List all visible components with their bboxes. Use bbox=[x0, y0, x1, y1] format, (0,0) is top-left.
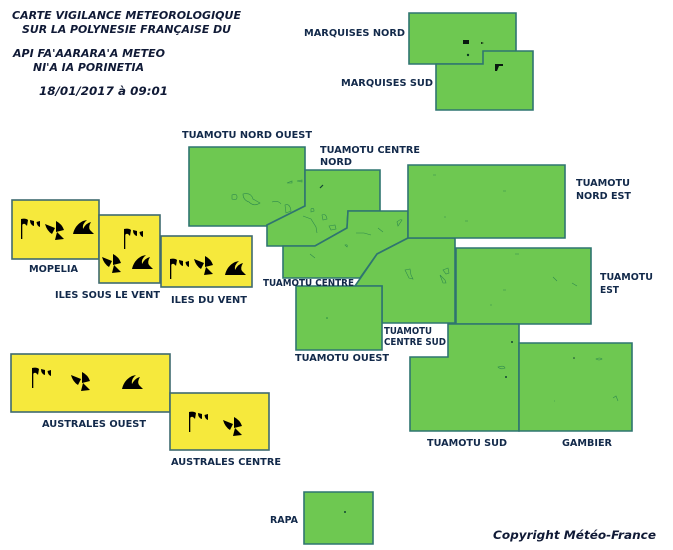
panel: Iles du Vent bbox=[161, 236, 252, 287]
label: Tuamotu Nord Ouest: TUAMOTU NORD OUEST bbox=[182, 130, 312, 141]
panel: Tuamotu Nord Est bbox=[408, 165, 565, 238]
panel: Marquises Nord bbox=[409, 13, 516, 64]
icon: wave bbox=[132, 255, 153, 269]
icon: wind bbox=[170, 259, 189, 279]
label: Tuamotu Est: TUAMOTU bbox=[600, 272, 653, 283]
icon: rain bbox=[194, 256, 213, 275]
label: Tuamotu Nord Est bbox=[576, 178, 631, 202]
icon: rain bbox=[223, 417, 242, 436]
panel: Tuamotu Centre bbox=[283, 211, 408, 278]
label: Tuamotu Centre Nord bbox=[320, 145, 420, 168]
panel: Marquises Sud bbox=[436, 51, 533, 110]
icon: rain bbox=[71, 372, 90, 391]
label: Tuamotu Centre Nord: TUAMOTU CENTRE bbox=[320, 145, 420, 156]
icon: wave bbox=[122, 375, 143, 389]
label: Tuamotu Est bbox=[600, 272, 653, 296]
label: Tuamotu Centre Sud: TUAMOTU bbox=[384, 326, 432, 337]
icon: wind bbox=[189, 412, 208, 432]
icon: wave bbox=[73, 220, 94, 234]
panel: Iles Sous le Vent bbox=[99, 215, 160, 283]
label: Tuamotu Nord Est: NORD EST bbox=[576, 191, 631, 202]
icon: wave bbox=[225, 261, 246, 275]
panel: Australes Ouest bbox=[11, 354, 170, 412]
icon: wind bbox=[21, 219, 40, 239]
label: Tuamotu Centre Sud bbox=[384, 326, 446, 348]
label: Marquises Sud: MARQUISES SUD bbox=[341, 78, 433, 89]
panel: Gambier bbox=[519, 343, 632, 431]
copyright: Copyright Météo-France bbox=[493, 528, 656, 542]
label: Tuamotu Nord Est: TUAMOTU bbox=[576, 178, 630, 189]
label: Tuamotu Centre Nord: NORD bbox=[320, 157, 352, 168]
label: Iles du Vent: ILES DU VENT bbox=[171, 295, 247, 306]
title block: SUR LA POLYNESIE FRANÇAISE DU bbox=[22, 24, 231, 36]
label: Gambier: GAMBIER bbox=[562, 438, 613, 449]
title block: CARTE VIGILANCE METEOROLOGIQUE bbox=[12, 10, 242, 22]
label: Iles Sous le Vent: ILES SOUS LE VENT bbox=[55, 290, 160, 301]
icon: rain bbox=[102, 254, 121, 273]
panel: Tuamotu Nord Ouest bbox=[189, 147, 305, 226]
panel: Tuamotu Ouest bbox=[296, 286, 382, 350]
panel: Mopelia bbox=[12, 200, 99, 259]
label: Tuamotu Sud: TUAMOTU SUD bbox=[427, 438, 507, 449]
label: Tuamotu Est: EST bbox=[600, 285, 619, 296]
panel: Tuamotu Centre Sud bbox=[355, 238, 455, 323]
label: Mopelia: MOPELIA bbox=[29, 264, 79, 275]
title block: NI'A IA PORINETIA bbox=[33, 62, 144, 74]
panel: Australes Centre bbox=[170, 393, 269, 450]
panel: Tuamotu Centre Nord bbox=[267, 170, 380, 246]
label: Tuamotu Centre Sud: CENTRE SUD bbox=[384, 337, 446, 348]
label: Tuamotu Ouest: TUAMOTU OUEST bbox=[295, 353, 389, 364]
label: Australes Centre: AUSTRALES CENTRE bbox=[171, 457, 281, 468]
panel: Rapa bbox=[304, 492, 373, 544]
icon: rain bbox=[45, 221, 64, 240]
icon: wind bbox=[32, 368, 51, 388]
title block bbox=[12, 10, 242, 98]
title block: API FA'AARARA'A METEO bbox=[12, 48, 165, 60]
label: Australes Ouest: AUSTRALES OUEST bbox=[42, 419, 146, 430]
panel: Tuamotu Est bbox=[456, 248, 591, 324]
title block: 18/01/2017 à 09:01 bbox=[39, 84, 168, 98]
icon: wind bbox=[124, 229, 143, 249]
label: Marquises Nord: MARQUISES NORD bbox=[304, 28, 405, 39]
panel: Tuamotu Sud bbox=[410, 324, 519, 431]
label: Tuamotu Centre: TUAMOTU CENTRE bbox=[263, 278, 354, 289]
label: Rapa: RAPA bbox=[270, 515, 299, 526]
